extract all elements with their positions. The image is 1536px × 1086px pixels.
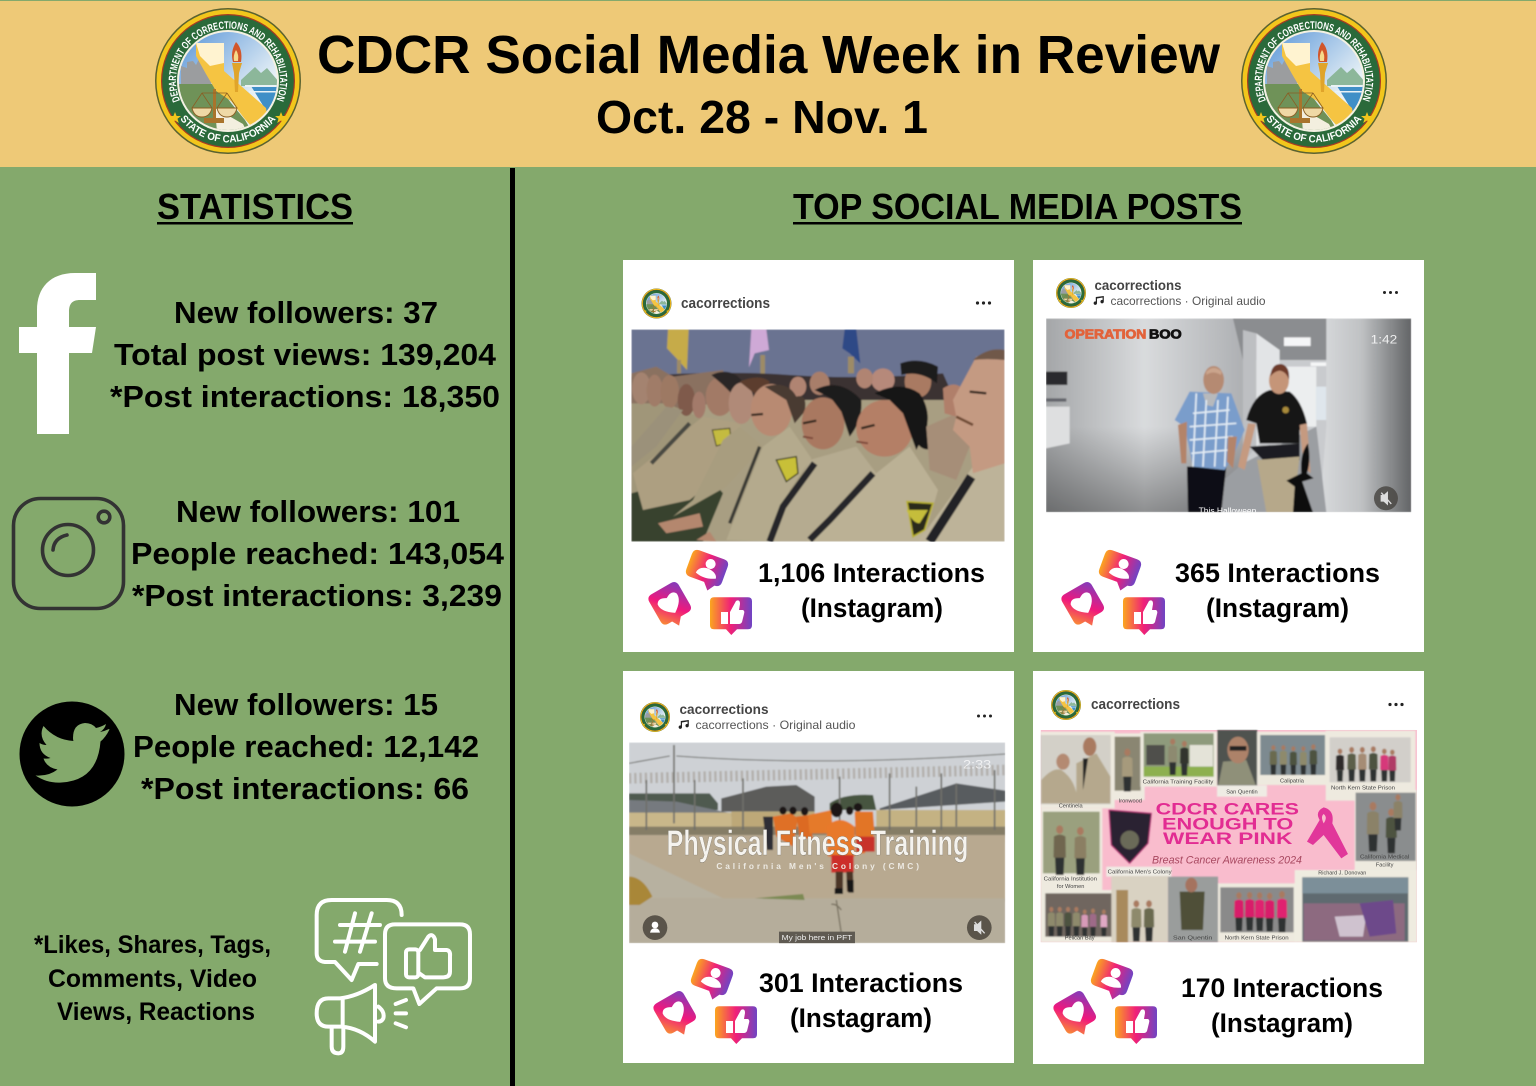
panel: post 4 [1033,671,1424,1064]
account name: cacorrections [1091,697,1180,713]
footnote: *Likes, Shares, Tags, [34,931,271,959]
panel: post 2 [1033,260,1424,652]
account name: cacorrections [681,296,770,312]
facebook statistics: New followers: 37 [174,295,438,330]
instagram statistics: People reached: 143,054 [131,536,505,571]
twitter statistics [133,687,479,806]
title: CDCR Social Media Week in Review [317,25,1221,85]
footnote: Views, Reactions [57,998,255,1026]
collage location labels: San Quentin [1226,790,1258,796]
collage location labels: Ironwood [1119,799,1142,805]
video subtitle: California Men's Colony (CMC) [716,861,919,871]
header banner [0,1,1536,167]
more menu [1383,291,1398,294]
collage location labels: North Kern State Prison [1225,936,1289,942]
right seal: STATE OF CALIFORNIA [1267,116,1362,142]
collage location labels: Richard J. Donovan [1318,870,1366,876]
more menu [1388,703,1404,706]
collage location labels: Calipatria [1280,779,1305,785]
account name and audio: cacorrections · Original audio [1110,294,1266,308]
collage location labels: for Women [1057,884,1084,890]
collage: cdcr cares enough to wear pink [1041,730,1417,942]
collage location labels: California Medical [1360,854,1409,860]
video duration: 1:42 [1371,332,1397,346]
heading: statistics: STATISTICS [157,186,353,227]
account avatar [1051,690,1081,720]
icon: twitter [20,702,124,806]
left seal [155,8,301,154]
facebook statistics [110,295,500,414]
video still: operation boo: BOO [1149,326,1182,341]
collage location labels: Facility [1376,862,1394,868]
account avatar [1056,278,1086,308]
right seal: DEPARTMENT OF CORRECTIONS AND REHABILITATION [1254,21,1374,103]
icon: instagram [14,498,124,608]
more menu [977,714,992,718]
left seal: STATE OF CALIFORNIA [181,116,276,142]
icon: reaction badges [651,957,757,1044]
collage location labels: North Kern State Prison [1331,785,1395,791]
account avatar [640,702,670,732]
interactions caption: (Instagram) [1206,593,1349,623]
interactions caption: (Instagram) [790,1003,932,1033]
instagram statistics [131,494,505,613]
panel: post 3 [623,671,1014,1063]
twitter statistics: People reached: 12,142 [133,729,479,764]
collage headline: WEAR PINK [1163,829,1292,848]
interactions caption: (Instagram) [801,593,943,623]
interactions caption [1181,973,1383,1038]
video still: operation boo [1046,318,1411,516]
icon: social hashtag, like and megaphone [317,900,470,1053]
interactions caption: (Instagram) [1211,1008,1353,1038]
collage location labels: California Men's Colony [1108,869,1172,875]
facebook statistics: *Post interactions: 18,350 [110,379,500,414]
interactions caption: 301 Interactions [759,968,963,998]
interactions caption: 1,106 Interactions [758,558,985,588]
instagram statistics: *Post interactions: 3,239 [132,578,502,613]
left seal: DEPARTMENT OF CORRECTIONS AND REHABILITATION [168,21,288,103]
collage location labels: California Training Facility [1143,780,1213,786]
icon: reaction badges [1059,548,1165,635]
interactions caption: 170 Interactions [1181,973,1383,1003]
collage location labels: California Institution [1044,876,1097,882]
collage headline: CDCR CARES [1156,800,1299,819]
collage headline: ENOUGH TO [1162,814,1293,833]
caption [779,932,855,943]
facebook statistics: Total post views: 139,204 [114,337,497,372]
interactions caption [1175,558,1380,623]
twitter statistics: New followers: 15 [174,687,438,722]
collage location labels [1044,779,1409,942]
collage location labels: Centinela [1059,803,1083,809]
account name and audio: cacorrections · Original audio [696,718,856,732]
account name and audio [679,702,856,732]
video still: physical fitness training [629,742,1005,943]
user button [643,915,667,940]
caption fragment: This Halloween, [1199,507,1259,516]
right seal [1241,8,1387,154]
icon: facebook [19,273,96,434]
icon: pink ribbon [1307,807,1348,858]
collage location labels: Pelican Bay [1065,936,1095,942]
twitter statistics: *Post interactions: 66 [141,771,469,806]
icon: reaction badges [646,548,752,635]
instagram statistics: New followers: 101 [176,494,460,529]
video text: operation boo: OPERATION [1065,326,1146,341]
more menu [976,301,991,305]
photo: seated officers [631,329,1005,542]
icon: reaction badges [1051,957,1157,1044]
mute button [1374,486,1398,510]
video duration: 2:33 [963,758,991,772]
video title: Physical Fitness Training [667,824,968,863]
interactions caption: 365 Interactions [1175,558,1380,588]
caption: My job here in PFT [782,933,853,942]
footnote [34,931,271,1026]
interactions caption [759,968,963,1033]
account name and audio [1094,278,1266,308]
account avatar [642,288,672,318]
account name and audio: cacorrections [1094,278,1182,293]
account name and audio: cacorrections [680,702,768,717]
collage tagline: Breast Cancer Awareness 2024 [1152,854,1302,866]
collage headline [1156,803,1298,844]
mute button [967,915,992,940]
collage location labels: San Quentin [1173,935,1212,941]
heading: top social media posts: TOP SOCIAL MEDIA POSTS [793,186,1242,227]
interactions caption [758,558,985,623]
panel: post 1 [623,260,1014,652]
subtitle: Oct. 28 - Nov. 1 [596,91,928,143]
footnote: Comments, Video [48,965,257,993]
